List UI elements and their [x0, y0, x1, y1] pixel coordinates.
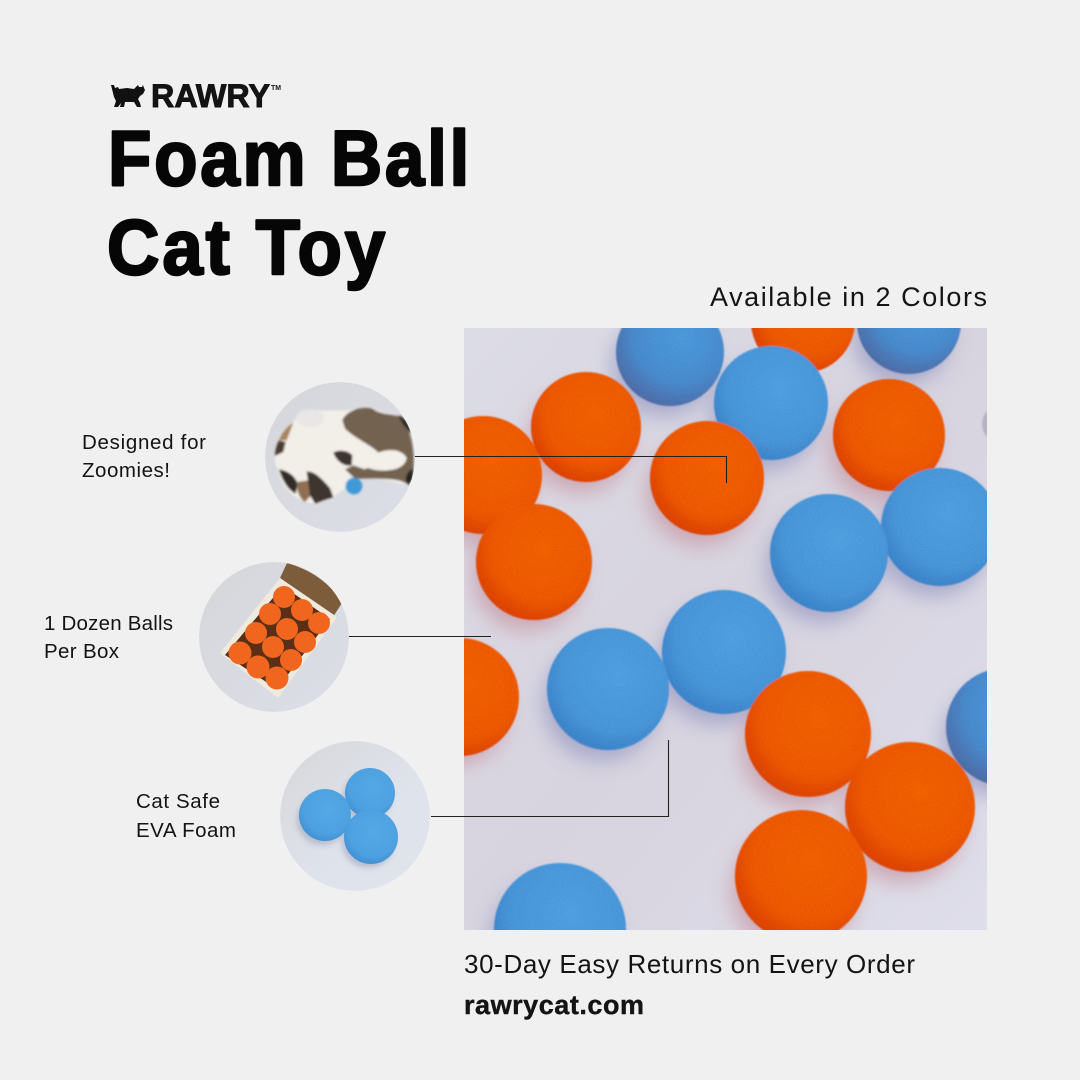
circle photo: box of twelve balls	[199, 562, 349, 712]
title: Foam Ball	[108, 114, 472, 202]
cat body fur	[275, 408, 414, 504]
label: dozen	[44, 612, 173, 663]
brown back fur	[342, 408, 414, 485]
circle photo: cat with ball	[265, 382, 415, 532]
brand logo	[111, 78, 281, 114]
label: EVA foam: EVA Foam	[136, 819, 236, 842]
blue ball	[346, 478, 362, 494]
leader lines	[349, 456, 726, 816]
ball shadows	[464, 328, 987, 930]
raised white leg	[367, 448, 408, 472]
trademark: TM	[271, 83, 281, 92]
cat face patches	[279, 469, 298, 494]
tucked paw	[297, 410, 322, 426]
label: dozen: Per Box	[44, 640, 120, 663]
faint distant ball	[982, 410, 987, 438]
dark chest patch	[333, 451, 352, 466]
box	[220, 578, 337, 698]
label: zoomies	[82, 431, 206, 482]
label: EVA foam: Cat Safe	[136, 790, 220, 813]
main photo: foam balls	[464, 328, 987, 930]
wordmark: RAWRY	[151, 78, 270, 114]
title: Cat Toy	[107, 203, 388, 291]
colors heading: Available in 2 Colors	[710, 282, 987, 312]
foam balls	[464, 328, 987, 930]
balls in box	[228, 586, 330, 690]
box flap	[280, 563, 342, 617]
label: zoomies: Zoomies!	[82, 459, 170, 482]
website: rawrycat.com	[464, 990, 644, 1020]
circle photo: three blue foam balls	[280, 741, 430, 891]
label: EVA foam	[136, 790, 236, 842]
title	[107, 114, 472, 291]
label: dozen: 1 Dozen Balls	[44, 612, 173, 635]
icon: cat silhouette	[111, 85, 145, 107]
shoulder patches	[275, 440, 286, 456]
returns text: 30-Day Easy Returns on Every Order	[464, 949, 915, 979]
label: zoomies: Designed for	[82, 431, 206, 454]
